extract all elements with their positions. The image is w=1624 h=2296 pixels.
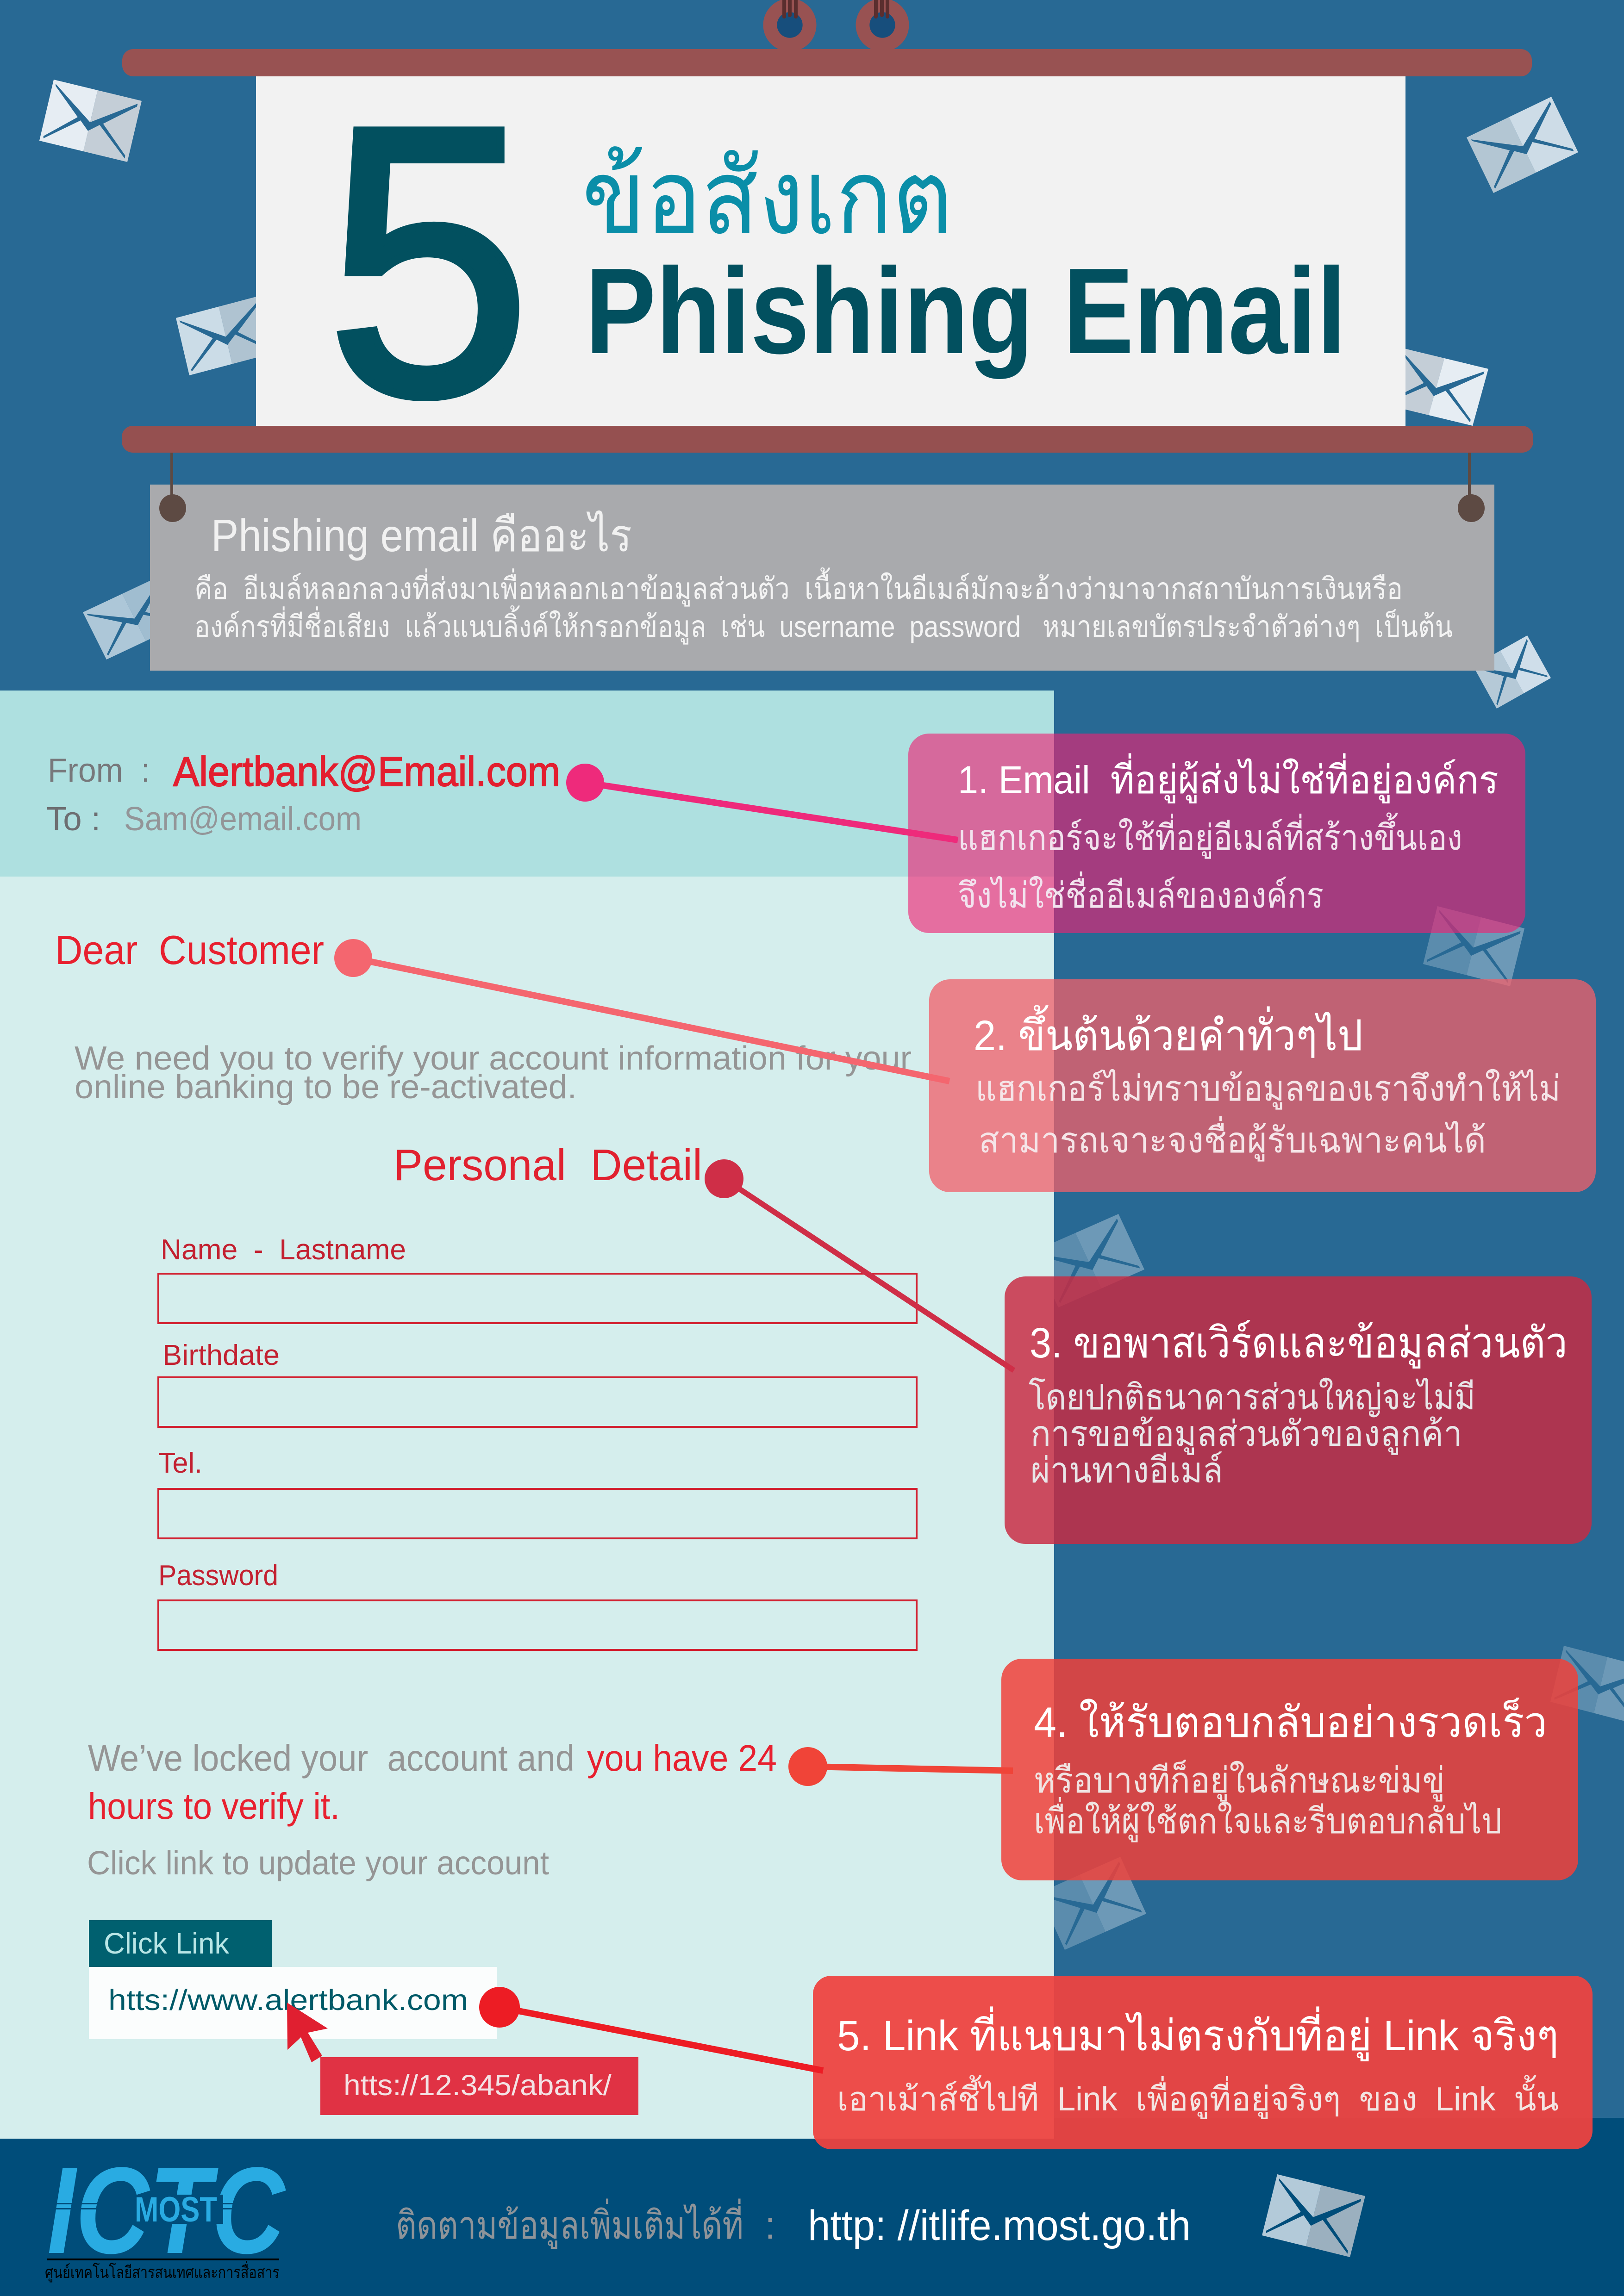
callout 1: sender address: แฮกเกอร์จะใช้ที่อยู่อีเมล์ที่สร้างขึ้นเอง [958, 812, 1462, 859]
title panel [256, 76, 1405, 426]
panel heading: Phishing email คืออะไร [211, 510, 632, 561]
callout 2: generic greeting: สามารถเจาะจงชื่อผู้รับเฉพาะคนได้ [979, 1116, 1486, 1162]
form fields [158, 1234, 917, 1650]
icon: footer envelope [1262, 2174, 1365, 2257]
urgency message: We’ve locked your account and [88, 1737, 575, 1779]
real url tooltip [320, 2057, 638, 2115]
to label: To : [46, 801, 100, 838]
form fields: Name - Lastname [161, 1234, 406, 1266]
hanger strings and knobs [159, 453, 1485, 522]
callout 5: mismatched link [813, 1976, 1593, 2149]
icon: faint envelope 3 [1550, 1646, 1624, 1724]
body text: online banking to be re-activated. [75, 1069, 577, 1106]
ICTC logo: MOST [135, 2190, 217, 2229]
update instruction: Click link to update your account [87, 1845, 549, 1882]
title scroll [122, 0, 1533, 474]
icon: mouse cursor [287, 2003, 328, 2062]
callout 5: mismatched link: เอาเม้าส์ชี้ไปที Link เพื่อดูที่อยู่จริงๆ ของ Link นั้น [837, 2075, 1559, 2119]
callout 4: urgent response: เพื่อให้ผู้ใช้ตกใจและรีบตอบกลับไป [1034, 1797, 1502, 1842]
connector 1 [566, 764, 958, 840]
icon: envelope behind grey panel right [1473, 635, 1551, 709]
panel: email body [0, 877, 1054, 2139]
big number 5: 5 [327, 48, 531, 474]
body text [75, 1040, 912, 1106]
to address: Sam@email.com [124, 801, 362, 838]
callout 3: asks for password: การขอข้อมูลส่วนตัวของลูกค้า [1031, 1414, 1462, 1455]
top roller [122, 49, 1532, 76]
title Thai: ข้อสังเกต [582, 139, 953, 255]
greeting: Dear Customer [55, 927, 324, 973]
icon: faint envelope 4 [1039, 1857, 1146, 1950]
panel paragraph [194, 567, 1453, 645]
colon: : [765, 2203, 775, 2247]
bottom roller [122, 426, 1533, 453]
icon: envelope top left [39, 80, 142, 162]
icon: envelope top right [1467, 97, 1578, 193]
callout 3: asks for password: ผ่านทางอีเมล์ [1031, 1451, 1223, 1490]
icon: envelope behind title left [176, 295, 275, 375]
panel: what is phishing email [150, 453, 1494, 671]
form fields: Password [158, 1560, 278, 1592]
callout 4: urgent response [1001, 1659, 1578, 1880]
connector 5 [479, 1987, 823, 2071]
hanging rings [763, 0, 909, 52]
callout 1: sender address [908, 734, 1525, 933]
panel paragraph: คือ อีเมล์หลอกลวงที่ส่งมาเพื่อหลอกเอาข้อมูลส่วนตัว เนื้อหาในอีเมล์มักจะอ้างว่ามาจากสถาบันการเงินหรือ [194, 567, 1403, 607]
fake url box: htts://www.alertbank.com [108, 1984, 468, 2016]
icon: faint envelope 2 [1032, 1214, 1144, 1307]
footer [0, 2139, 1624, 2296]
callout 4: urgent response: หรือบางทีก็อยู่ในลักษณะข่มขู่ [1034, 1760, 1445, 1802]
form fields: Birthdate [162, 1339, 280, 1371]
panel: email header band [0, 691, 1054, 877]
panel paragraph: องค์กรที่มีชื่อเสียง แล้วแนบลิ้งค์ให้กรอกข้อมูล เช่น username password หมายเลขบัตรประจำตัวต่างๆ เป็นต้น [194, 605, 1453, 645]
website url: http: //itlife.most.go.th [808, 2202, 1191, 2249]
callout 3: asks for password: 3. ขอพาสเวิร์ดและข้อมูลส่วนตัว [1030, 1319, 1568, 1369]
from address: Alertbank@Email.com [173, 749, 560, 795]
callout 1: sender address: 1. Email ที่อยู่ผู้ส่งไม่ใช่ที่อยู่องค์กร [958, 753, 1499, 803]
click link button: Click Link [104, 1927, 230, 1960]
icon: faint envelope 1 [1423, 906, 1524, 986]
form fields: Tel. [158, 1447, 202, 1479]
callout 3: asks for password [1005, 1276, 1592, 1544]
connector 4 [788, 1747, 1013, 1786]
ICTC logo: ICTC [47, 2142, 286, 2279]
title Phishing Email: Phishing Email [585, 243, 1346, 380]
follow text: ติดตามข้อมูลเพิ่มเติมได้ที่ [396, 2198, 743, 2249]
urgency message: hours to verify it. [88, 1786, 340, 1827]
urgency message [88, 1737, 777, 1827]
form heading: Personal Detail [394, 1140, 702, 1190]
callout 3: asks for password: โดยปกติธนาคารส่วนใหญ่จะไม่มี [1029, 1377, 1475, 1417]
callout 4: urgent response: 4. ให้รับตอบกลับอย่างรวดเร็ว [1034, 1697, 1547, 1746]
connector 3 [705, 1159, 1014, 1370]
real url tooltip: htts://12.345/abank/ [344, 2069, 612, 2102]
body text: We need you to verify your account information for your [75, 1040, 912, 1077]
icon: envelope behind title right [1385, 348, 1488, 426]
click link button [89, 1920, 272, 1967]
icon: envelope behind grey panel left [83, 575, 185, 660]
connector 2 [334, 939, 949, 1081]
callout 2: generic greeting [929, 979, 1596, 1192]
fake url box [89, 1967, 497, 2039]
from label: From : [48, 752, 150, 789]
callout 2: generic greeting: แฮกเกอร์ไม่ทราบข้อมูลของเราจึงทำให้ไม่ [975, 1069, 1561, 1110]
urgency message: you have 24 [587, 1737, 777, 1779]
callout 5: mismatched link: 5. Link ที่แนบมาไม่ตรงกับที่อยู่ Link จริงๆ [837, 2006, 1559, 2061]
callout 1: sender address: จึงไม่ใช่ชื่ออีเมล์ขององค์กร [958, 871, 1324, 915]
ICTC logo: ศูนย์เทคโนโลยีสารสนเทศและการสื่อสาร [45, 2261, 280, 2283]
callout 2: generic greeting: 2. ขึ้นต้นด้วยคำทั่วๆไป [974, 1005, 1363, 1059]
